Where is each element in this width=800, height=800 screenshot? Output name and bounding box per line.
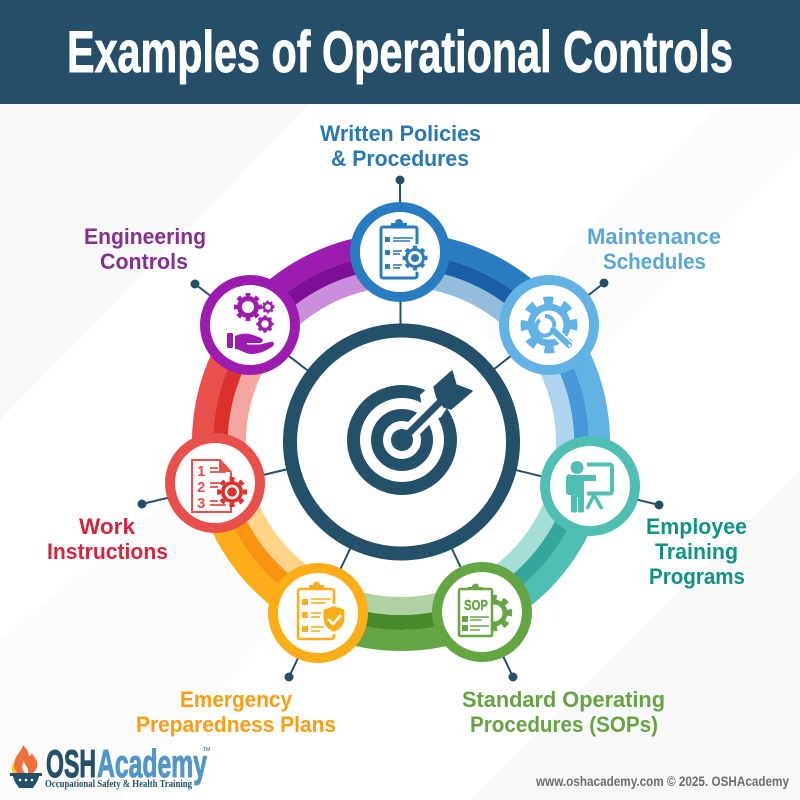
label: employee training programs	[646, 514, 747, 589]
logo: OSHAcademy	[10, 743, 210, 790]
label: employee training programs: Training	[655, 539, 738, 564]
node: work instructions icon: 2	[197, 479, 205, 496]
ring segments	[122, 163, 680, 721]
label: standard operating procedures: Procedures (SOPs)	[470, 712, 658, 737]
node: engineering controls icon	[205, 280, 295, 370]
label: maintenance schedules: Schedules	[603, 249, 706, 274]
logo: OSHAcademy: TM	[203, 747, 210, 753]
label: written policies: Written Policies	[320, 121, 481, 146]
node: work instructions icon: 3	[197, 495, 205, 512]
node: written policies icon	[355, 207, 445, 297]
logo: OSHAcademy: OSH	[46, 743, 96, 786]
label: maintenance schedules: Maintenance	[587, 224, 721, 249]
header: title banner	[0, 0, 800, 104]
label: engineering controls: Engineering	[84, 224, 206, 249]
node: maintenance icon	[504, 280, 594, 370]
label: written policies	[320, 121, 481, 171]
label: written policies: & Procedures	[331, 146, 469, 171]
node: emergency preparedness icon	[273, 568, 363, 658]
label: work instructions	[47, 514, 168, 564]
label: employee training programs: Programs	[649, 564, 745, 589]
logo: OSHAcademy: Academy	[97, 743, 207, 786]
label: emergency preparedness plans	[136, 687, 336, 737]
node: work instructions icon: 1	[197, 463, 205, 480]
label: employee training programs: Employee	[646, 514, 747, 539]
central hub with target icon	[290, 330, 513, 554]
label: standard operating procedures	[462, 687, 665, 737]
connector spokes	[138, 176, 662, 680]
node: work instructions icon	[170, 438, 260, 528]
label: emergency preparedness plans: Preparedness Plans	[136, 712, 336, 737]
label: emergency preparedness plans: Emergency	[180, 687, 293, 712]
label: work instructions: Instructions	[47, 539, 168, 564]
label: engineering controls: Controls	[100, 249, 188, 274]
node: SOP icon: SOP	[464, 597, 488, 614]
logo: OSHAcademy: Occupational Safety & Health Training	[45, 779, 192, 790]
node: employee training icon	[545, 441, 635, 531]
label: work instructions: Work	[79, 514, 136, 539]
node: SOP icon	[437, 567, 527, 657]
label: maintenance schedules	[587, 224, 721, 274]
label: standard operating procedures: Standard Operating	[462, 687, 665, 712]
label: engineering controls	[84, 224, 206, 274]
